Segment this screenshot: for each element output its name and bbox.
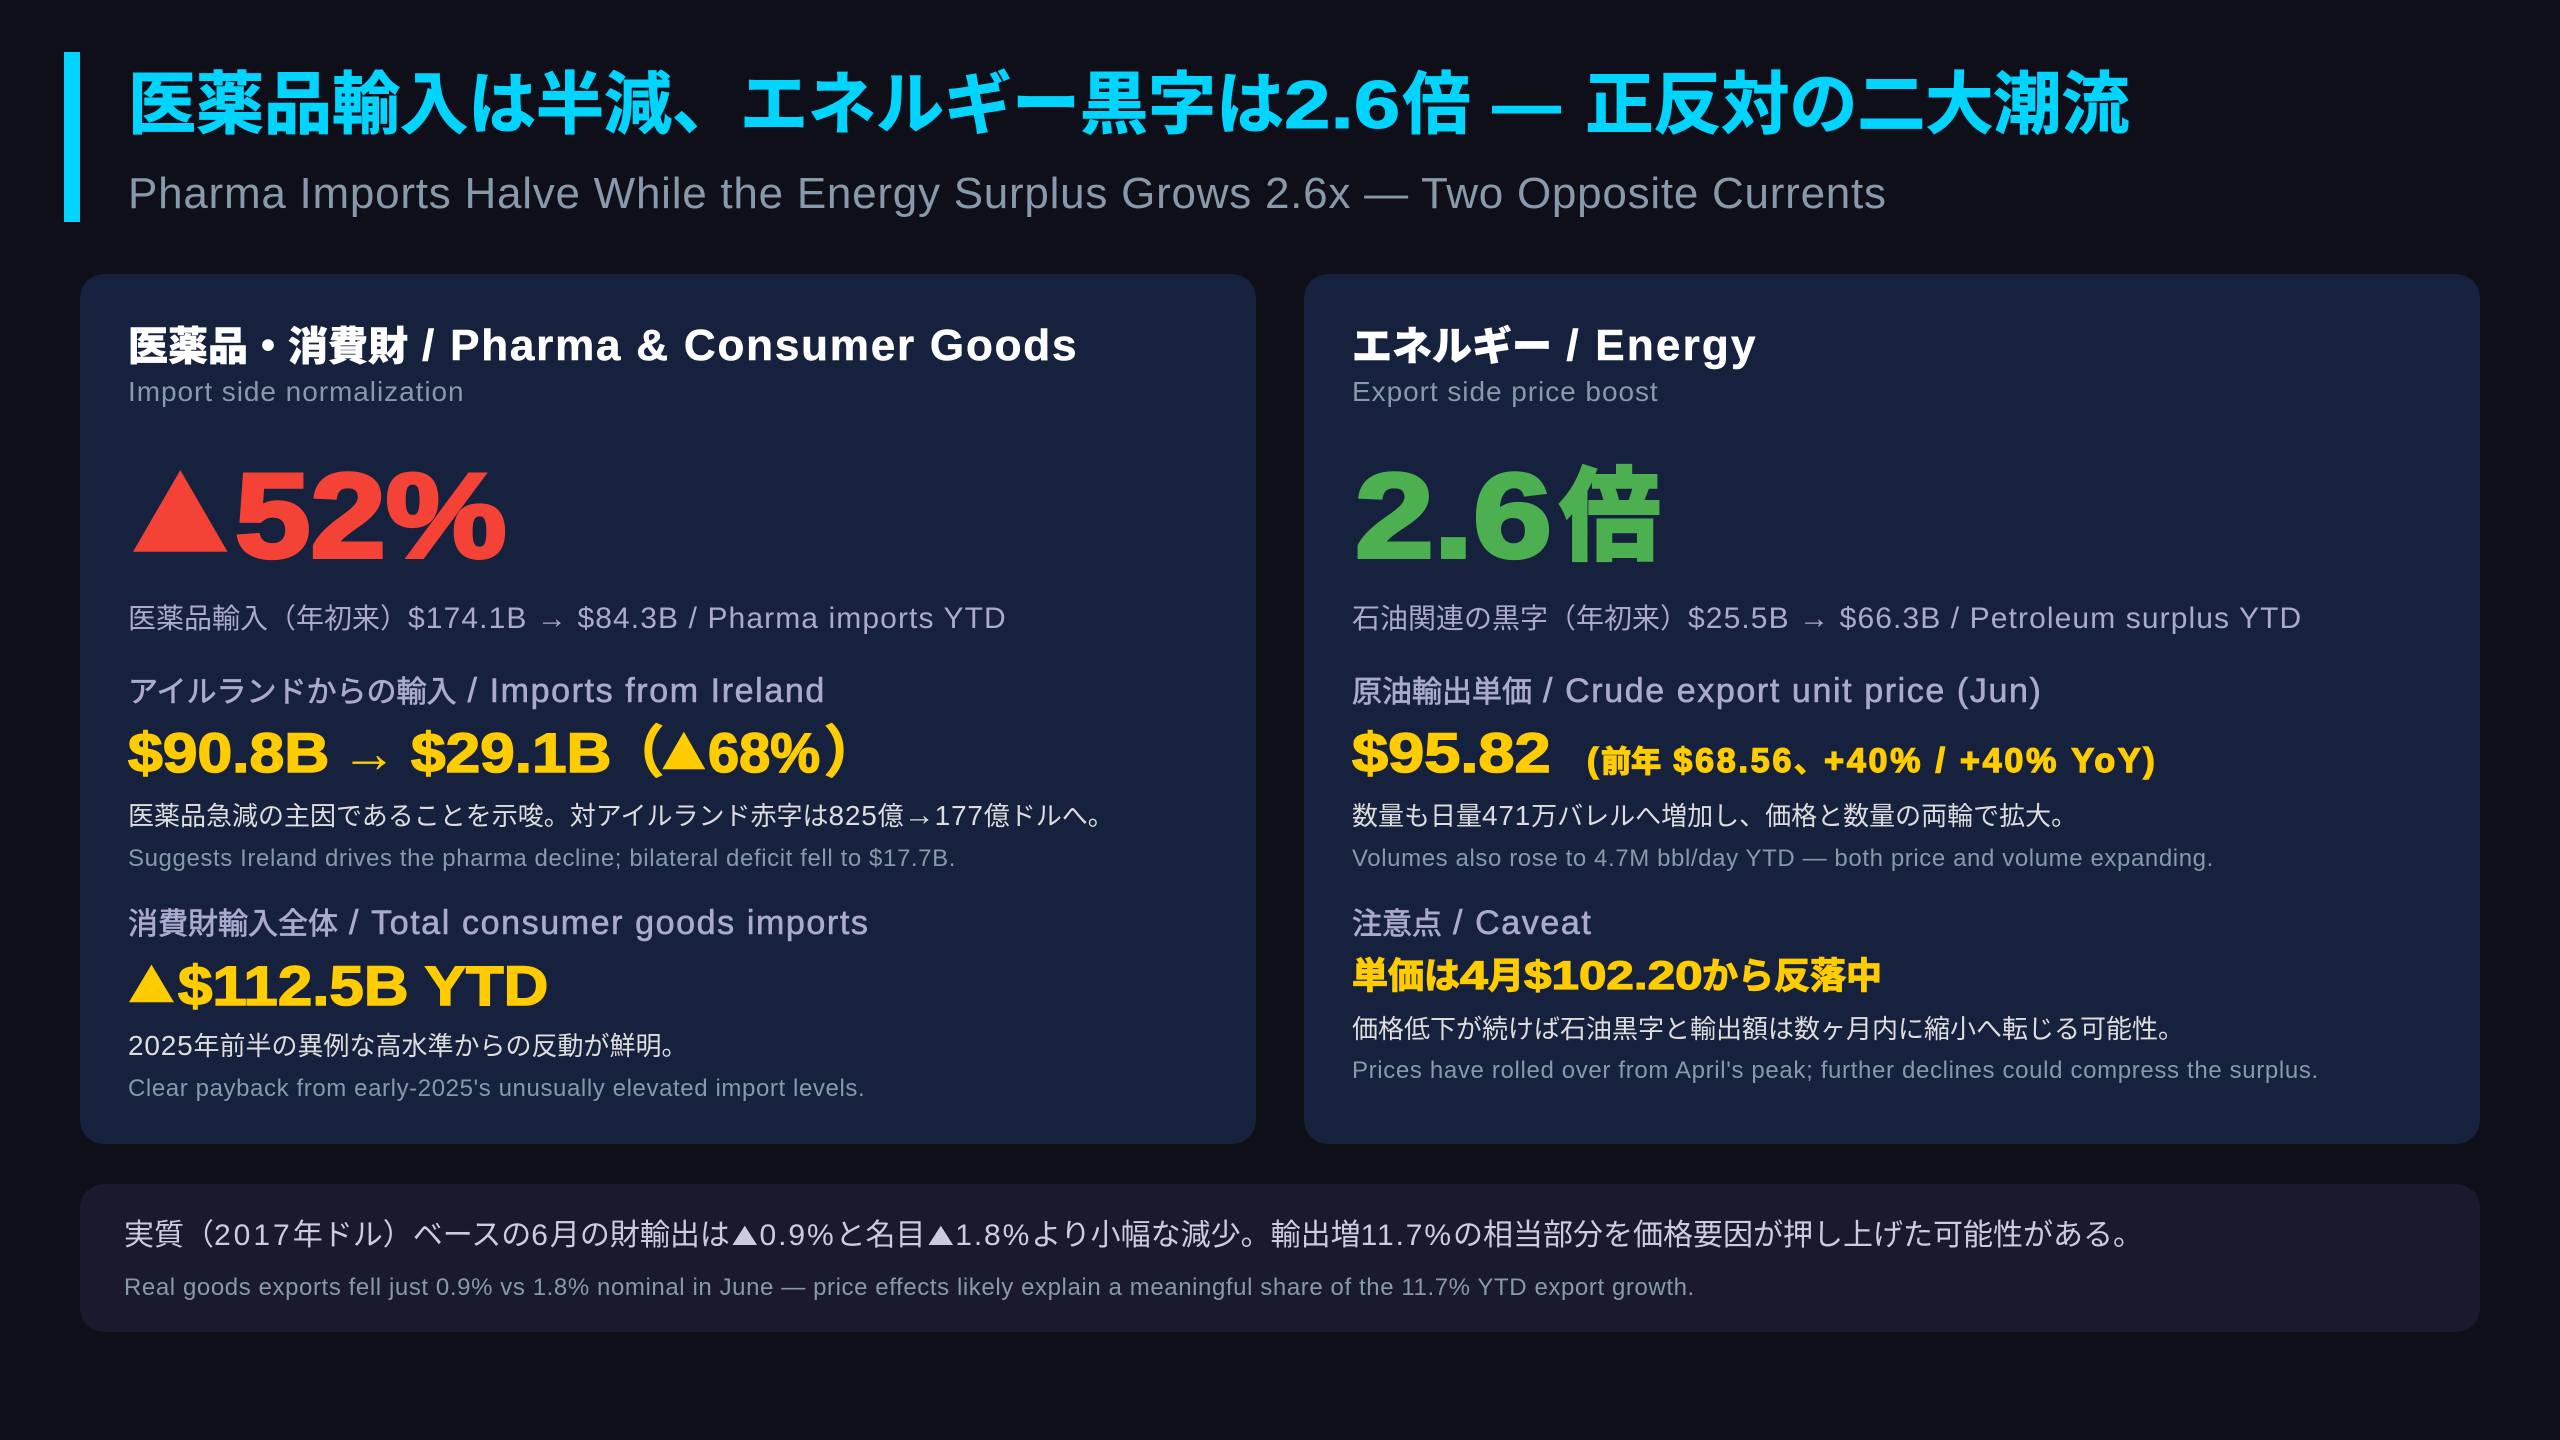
note: Ireland English: Suggests Ireland drives the pharma decline; bilateral deficit fell to $17.7B. [128, 845, 956, 872]
value: Ireland imports: → [341, 721, 397, 784]
note: caveat Japanese: 価格低下が続けば石油黒字と輸出額は数ヶ月内に縮小へ転じる可能性。 [1352, 1014, 2184, 1044]
stat description: 医薬品輸入（年初来）$174.1B → $84.3B / Pharma imports YTD [128, 602, 1007, 635]
bottom note Japanese: ▲ [724, 1217, 765, 1253]
big stat: pharma decline: 52% [235, 449, 506, 583]
panel subheading: Export side price boost [1352, 376, 1659, 407]
value: consumer goods: $112.5B YTD [178, 954, 548, 1017]
value: consumer goods: ▲ [116, 947, 187, 1014]
value: caveat: 月 [1488, 955, 1524, 996]
big stat: pharma decline [107, 435, 506, 583]
panel heading: 医薬品・消費財 / Pharma & Consumer Goods [128, 321, 1078, 370]
big stat: surplus multiple [1355, 449, 1660, 583]
value: Ireland imports: （ [608, 721, 664, 784]
panel: bottom note [80, 1184, 2480, 1332]
title accent bar [64, 52, 80, 222]
value: caveat: 単価は [1352, 955, 1460, 996]
title: 医薬品輸入は半減、エネルギー黒字は 倍 — 正反対の二大潮流 [128, 67, 2129, 143]
panel heading: エネルギー / Energy [1352, 321, 1758, 370]
panel subheading: Import side normalization [128, 376, 465, 407]
value: crude price [1352, 721, 2158, 784]
bottom note English: Real goods exports fell just 0.9% vs 1.8% nominal in June — price effects likely explain a meaningful share of the 11.7% YTD export growth. [124, 1274, 1695, 1301]
value: Ireland imports [128, 714, 880, 784]
label: Ireland imports: アイルランドからの輸入 / Imports from Ireland [128, 672, 826, 710]
bottom note Japanese: 実質（2017年ドル）ベースの6月の財輸出は 0.9%と名目 1.8%より小幅な減少。輸出増11.7%の相当部分を価格要因が押し上げた可能性がある。 [124, 1219, 2143, 1252]
panel: pharma and consumer goods [80, 274, 1256, 1144]
value: crude price: $95.82 [1352, 721, 1551, 784]
value: crude price: (前年 $68.56、+40% / +40% YoY) [1587, 742, 2158, 780]
note: crude English: Volumes also rose to 4.7M bbl/day YTD — both price and volume expanding. [1352, 845, 2214, 872]
label: crude price: 原油輸出単価 / Crude export unit price (Jun) [1352, 672, 2042, 710]
panel: energy [1304, 274, 2480, 1144]
big stat: surplus multiple: 2.6 [1355, 449, 1552, 583]
big stat: pharma decline: ▲ [107, 435, 254, 577]
value: Ireland imports: $29.1B [411, 721, 611, 784]
value: Ireland imports: $90.8B [128, 721, 329, 784]
value: caveat: $102.20 [1524, 954, 1703, 998]
note: Ireland Japanese: 医薬品急減の主因であることを示唆。対アイルランド赤字は825億→177億ドルへ。 [128, 797, 1114, 832]
label: caveat: 注意点 / Caveat [1352, 904, 1592, 942]
title: 2.6 [1284, 67, 1400, 143]
note: caveat English: Prices have rolled over from April's peak; further declines could compress the surplus. [1352, 1057, 2319, 1084]
value: Ireland imports: ） [824, 721, 880, 784]
value: caveat [1352, 954, 1882, 998]
bottom note Japanese: ▲ [920, 1217, 961, 1253]
subtitle: Pharma Imports Halve While the Energy Surplus Grows 2.6x — Two Opposite Currents [128, 169, 1887, 218]
value: caveat: から反落中 [1702, 955, 1882, 996]
value: Ireland imports: ▲ [650, 714, 718, 781]
big stat: surplus multiple: 倍 [1560, 461, 1660, 573]
note: consumer goods English: Clear payback from early-2025's unusually elevated import levels. [128, 1075, 865, 1102]
value: Ireland imports: 68% [708, 721, 820, 784]
stat description: 石油関連の黒字（年初来）$25.5B → $66.3B / Petroleum surplus YTD [1352, 602, 2302, 635]
note: consumer goods Japanese: 2025年前半の異例な高水準からの反動が鮮明。 [128, 1030, 688, 1061]
note: crude Japanese: 数量も日量471万バレルへ増加し、価格と数量の両輪で拡大。 [1352, 800, 2077, 831]
value: caveat: 4 [1460, 954, 1488, 998]
label: consumer goods: 消費財輸入全体 / Total consumer goods imports [128, 904, 869, 942]
